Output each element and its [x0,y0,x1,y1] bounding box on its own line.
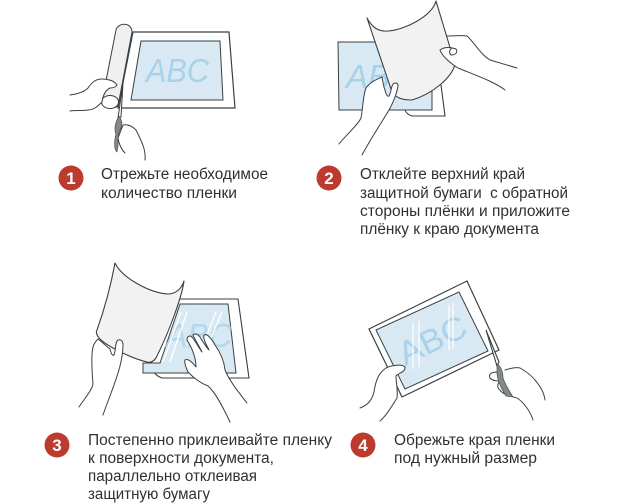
step 1 caption [58,166,268,202]
number badge 4: 4 [358,436,368,455]
icon: right hand on film [185,334,247,422]
step 3 text: к поверхности документа, [88,450,274,467]
step 4 caption [350,432,555,467]
step 3 text: параллельно отклеивая [88,468,257,485]
ABC lettering: ABC [164,317,233,354]
icon: left hand [339,77,398,155]
number badge 3: 3 [52,436,62,455]
step 3 caption [44,432,332,503]
blue document sheet [376,292,488,389]
icon: scissors [486,330,513,397]
number badge 1 [58,166,84,190]
film roll [102,24,132,108]
panel: step 1 illustration [70,24,235,160]
protective paper sheet [367,1,455,100]
step 3 text: Постепенно приклеивайте пленку [88,432,332,449]
icon: right hand holding scissors [118,125,145,160]
icon: right hand holding scissors [489,368,545,420]
film frame [369,281,499,397]
step 1 text: количество пленки [101,185,237,202]
icon: right hand thumb [440,48,505,90]
blue document sheet [338,42,432,110]
protective paper sheet [96,263,184,362]
icon: scissors [115,83,123,152]
step 2 caption [316,166,570,238]
icon: left hand holding roll [70,79,117,111]
step 2 text: стороны плёнки и приложите [360,203,570,220]
film streaks [413,303,453,369]
icon: left hand [360,365,405,421]
step 3 text: защитную бумагу [88,486,210,503]
blue document sheet [131,41,223,100]
icon: left hand [79,339,123,415]
document frame [118,32,235,108]
step 2 text: защитной бумаги с обратной [360,185,568,202]
panel: step 4 illustration [360,281,545,421]
number badge 3 [44,432,70,458]
panel: step 3 illustration [79,263,249,422]
step 1 text: Отрежьте необходимое [101,166,268,183]
panel: step 2 illustration [338,1,517,155]
ABC lettering: ABC [392,307,473,372]
document frame [153,299,249,378]
number badge 2 [316,166,342,190]
number badge 4 [350,432,376,458]
blue document sheet [143,304,236,373]
film streaks [163,312,222,362]
ABC lettering: AB [344,58,390,95]
document frame edge [403,85,445,116]
ABC lettering: ABC [144,52,210,89]
number badge 2: 2 [324,169,334,188]
icon: right hand fingers [446,36,517,68]
step 2 text: плёнку к краю документа [360,221,539,238]
step 4 text: под нужный размер [394,450,537,467]
step 2 text: Отклейте верхний край [360,166,525,183]
number badge 1: 1 [66,169,76,188]
step 4 text: Обрежьте края пленки [394,432,555,449]
